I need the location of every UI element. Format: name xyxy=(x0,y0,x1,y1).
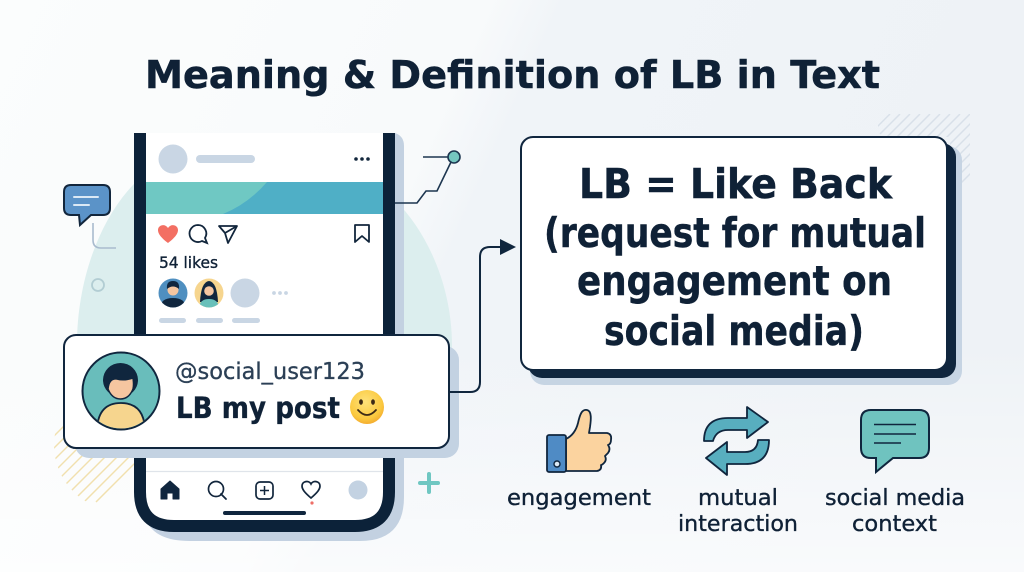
icon: chat bubble left xyxy=(64,185,110,225)
phone screen and frame xyxy=(140,133,389,526)
post image band xyxy=(146,182,383,214)
label: mutual interaction: mutual xyxy=(698,486,778,511)
comment text: LB my post xyxy=(176,391,340,425)
username: @social_user123 xyxy=(175,359,365,385)
definition text xyxy=(544,160,926,355)
icon: mutual arrows xyxy=(704,407,769,475)
icon: context speech bubble xyxy=(861,410,929,472)
icon: bookmark xyxy=(355,225,369,242)
icon: comment xyxy=(189,225,207,243)
label: mutual interaction: interaction xyxy=(678,512,798,537)
label: mutual interaction xyxy=(678,486,798,537)
decorative blob behind phone xyxy=(77,159,452,450)
bottom nav xyxy=(146,472,383,515)
label: social media context: context xyxy=(852,512,937,537)
panel: user comment card xyxy=(64,335,459,458)
post header xyxy=(158,144,370,174)
comment placeholder lines xyxy=(159,318,260,323)
icon: smiley emoji xyxy=(350,390,384,424)
icon: thumbs up xyxy=(547,410,611,472)
label: social media context: social media xyxy=(825,486,965,511)
arrow: card to definition xyxy=(449,239,516,392)
panel: definition box xyxy=(521,137,962,385)
decorative small connector left xyxy=(93,223,116,248)
title: Meaning & Definition of LB in Text xyxy=(145,53,880,97)
decorative hatch: lower left xyxy=(54,426,134,502)
label: engagement: engagement xyxy=(507,486,651,511)
icon: send xyxy=(219,226,237,243)
definition text: social media) xyxy=(604,307,864,355)
phone shadow xyxy=(146,133,404,541)
liker avatars xyxy=(158,278,288,309)
user avatar xyxy=(82,352,160,432)
likes count: 54 likes xyxy=(159,253,218,272)
decorative hatch: upper right xyxy=(878,114,970,183)
decorative ring xyxy=(92,279,104,291)
decorative plus xyxy=(420,474,438,492)
icon: heart xyxy=(158,225,178,243)
definition text: (request for mutual xyxy=(544,209,926,257)
connector from phone to node xyxy=(395,151,460,203)
definition text: LB = Like Back xyxy=(579,160,894,208)
definition text: engagement on xyxy=(577,257,892,305)
label: social media context xyxy=(825,486,965,537)
phone mockup xyxy=(140,133,404,541)
